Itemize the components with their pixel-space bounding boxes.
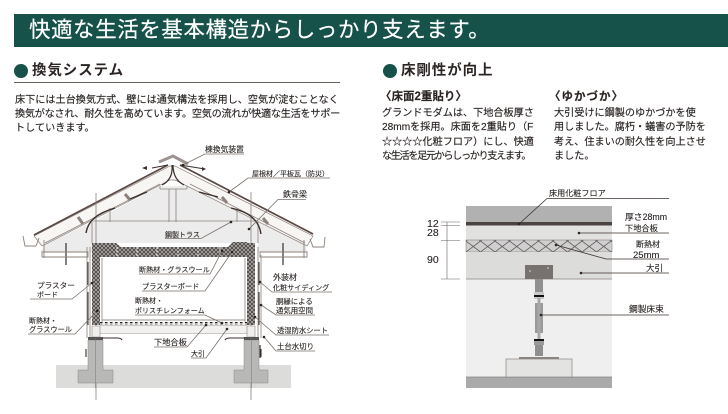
diagram labels: プラスターボード: [142, 282, 199, 291]
text block: double layer floor: [382, 107, 534, 162]
diagram labels: 化粧サイディング: [273, 283, 329, 292]
text block: ventilation description: トしていきます。: [15, 123, 95, 134]
subheading: floor post: 〈ゆかづか〉: [549, 91, 624, 103]
text block: ventilation description: 床下には土台換気方式、壁には通気構法を採用し、空気が淀むことなく: [15, 95, 339, 106]
sill: [88, 337, 259, 340]
diagram labels: 断熱材・: [135, 296, 163, 305]
diagram labels: ボード: [37, 291, 58, 299]
text block: double layer floor: ☆☆☆☆化粧フロア）にし、快適: [382, 137, 534, 148]
text block: floor post: 考え、住まいの耐久性を向上させ: [554, 137, 706, 148]
diagram labels: 通気用空間: [276, 306, 313, 315]
callout dots: [91, 164, 265, 338]
concrete block: [506, 359, 572, 377]
text block: double layer floor: グランドモダムは、下地合板厚さ: [382, 108, 534, 119]
text block: ventilation description: [15, 94, 340, 134]
ceiling insulation: [100, 242, 247, 257]
floor labels: 大引: [646, 263, 663, 273]
dimension numbers: 12: [427, 218, 439, 230]
diagram labels: 透湿防水シート: [277, 326, 328, 335]
callout lines: [28, 154, 332, 358]
floor labels: 25mm: [633, 250, 659, 261]
house section diagram: [23, 144, 332, 400]
roof: [34, 165, 313, 246]
diagram labels: グラスウール: [29, 325, 72, 334]
heading: ventilation system: [14, 62, 340, 83]
text block: floor post: ました。: [554, 151, 594, 162]
floor labels: 断熱材: [636, 239, 660, 249]
dimension numbers: 90: [427, 254, 439, 266]
text block: floor post: 用しました。腐朽・蟻害の予防を: [554, 122, 706, 133]
dimension lines: [441, 222, 460, 279]
steel floor post: [519, 265, 559, 359]
diagram labels: 下地合板: [154, 337, 187, 347]
text block: double layer floor: 28mmを採用。床面を2重貼り（F: [382, 122, 533, 133]
attic fill: [40, 186, 308, 252]
diagram labels: ポリスチレンフォーム: [135, 307, 205, 315]
title banner: 快適な生活を基本構造からしっかり支えます。: [29, 18, 490, 42]
diagram labels: 棟換気装置: [205, 144, 244, 154]
diagram labels: 土台水切り: [277, 342, 314, 351]
airflow arrows: [66, 192, 283, 358]
floor labels: 鋼製床束: [629, 303, 664, 314]
heading: ventilation system: 換気システム: [32, 63, 124, 79]
centre lines: [96, 338, 252, 388]
attic truss lines: [92, 192, 258, 400]
text block: floor post: 大引受けに鋼製のゆかづかを使: [554, 108, 696, 119]
wall sheathing: [87, 247, 261, 338]
text block: double layer floor: な生活を足元からしっかり支えます。: [382, 151, 530, 162]
floor labels: 厚さ28mm: [625, 212, 667, 222]
dimension numbers: 28: [427, 227, 439, 239]
diagram labels: 断熱材・グラスウール: [139, 265, 210, 274]
ridge vent: [142, 156, 206, 222]
text block: floor post: [554, 107, 706, 162]
ground: [56, 365, 291, 388]
diagram labels: [29, 144, 329, 358]
diagram labels: 断熱材・: [29, 316, 57, 325]
insulation studs: [117, 247, 220, 257]
subheading: double layer floor: 〈床面2重貼り〉: [380, 91, 467, 103]
eaves and gutters: [23, 236, 325, 258]
wall insulation: [92, 243, 255, 325]
text block: ventilation description: 換気がなされ、耐久性を高めています。空気の流れが快適な生活をサポー: [15, 109, 340, 120]
diagram labels: 外装材: [273, 272, 297, 282]
floor labels: 床用化粧フロア: [549, 188, 606, 198]
diagram labels: 大引: [191, 349, 205, 358]
diagram labels: 屋根材／平板瓦（防災）: [252, 169, 329, 178]
diagram labels: 鋼製トラス: [165, 230, 200, 239]
floor section diagram: [427, 188, 669, 388]
floor callout dots: [518, 223, 582, 316]
diagram labels: プラスター: [37, 281, 75, 290]
foundations: [78, 340, 268, 383]
floor callout lines: [519, 198, 669, 315]
diagram labels: 鉄骨梁: [283, 189, 307, 199]
diagram labels: 胴縁による: [276, 297, 313, 306]
title banner: [14, 14, 728, 47]
floor layers: [466, 206, 612, 222]
floor labels: [549, 188, 667, 314]
heading: floor rigidity: 床剛性が向上: [401, 63, 493, 79]
floor: [92, 320, 255, 337]
dimension numbers: [427, 218, 439, 266]
sill flow arrows: [86, 338, 261, 357]
floor labels: 下地合板: [625, 223, 658, 233]
